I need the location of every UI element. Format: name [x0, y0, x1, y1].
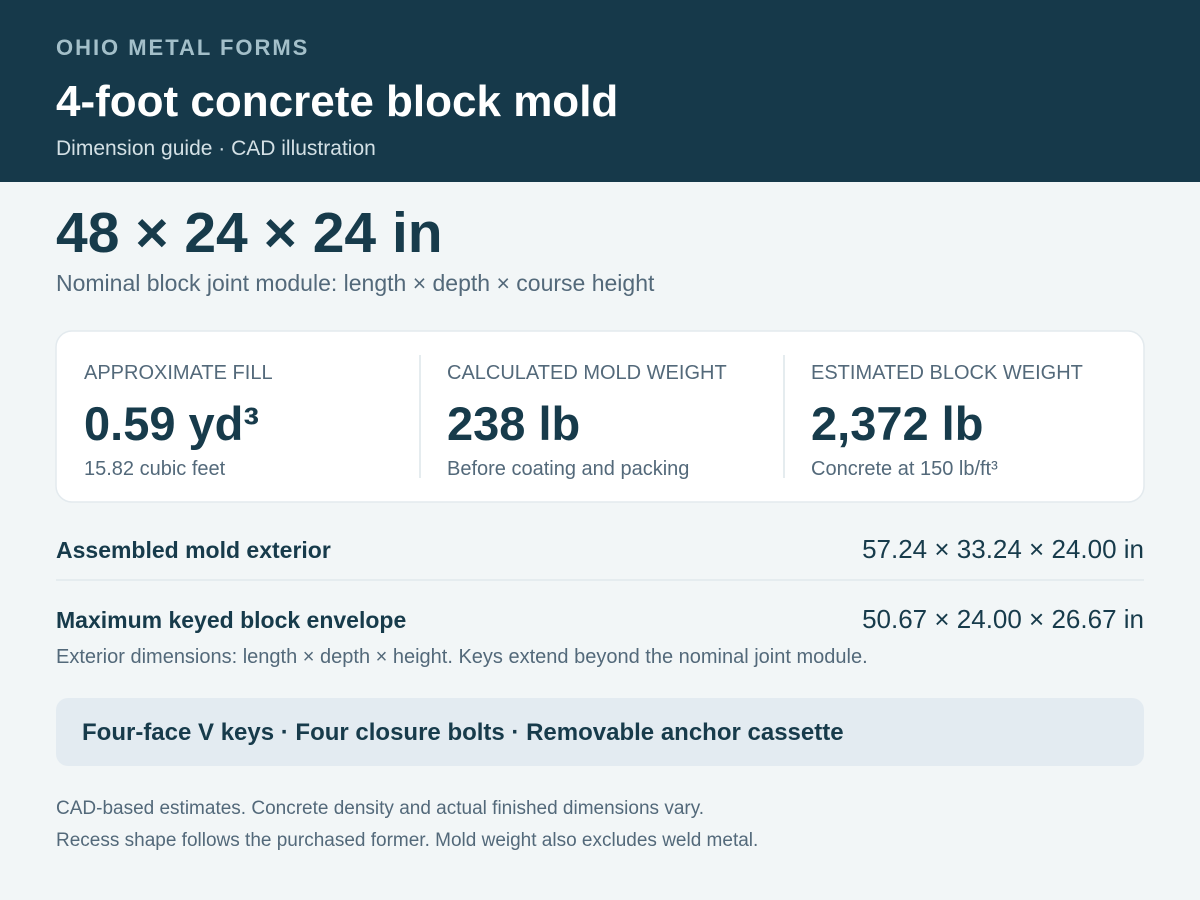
stat label: ESTIMATED BLOCK WEIGHT — [811, 362, 1083, 384]
title: 4-foot concrete block mold — [56, 77, 618, 126]
hero caption: Nominal block joint module: length × depth × course height — [56, 270, 654, 296]
stat: approximate fill — [84, 362, 273, 480]
stat label: APPROXIMATE FILL — [84, 362, 273, 384]
stat value: 238 lb — [447, 397, 580, 450]
footnotes: Recess shape follows the purchased former. Mold weight also excludes weld metal. — [56, 830, 758, 851]
stat label: CALCULATED MOLD WEIGHT — [447, 362, 727, 384]
dimensions note: Exterior dimensions: length × depth × height. Keys extend beyond the nominal joint module. — [56, 646, 868, 668]
stat note: Before coating and packing — [447, 458, 689, 480]
stat note: 15.82 cubic feet — [84, 458, 225, 480]
row value: maximum keyed block envelope: 50.67 × 24.00 × 26.67 in — [862, 604, 1144, 634]
stat value: 2,372 lb — [811, 397, 983, 450]
subtitle: Dimension guide · CAD illustration — [56, 137, 376, 160]
row label: maximum keyed block envelope: Maximum keyed block envelope — [56, 607, 406, 633]
hero dimension: 48 × 24 × 24 in — [56, 201, 443, 265]
eyebrow: brand: OHIO METAL FORMS — [56, 35, 309, 60]
footnotes — [56, 798, 758, 851]
feature text: Four-face V keys · Four closure bolts · Removable anchor cassette — [82, 719, 844, 746]
row label: assembled mold exterior: Assembled mold exterior — [56, 537, 331, 563]
stat value: 0.59 yd³ — [84, 397, 259, 450]
footnotes: CAD-based estimates. Concrete density and actual finished dimensions vary. — [56, 798, 704, 819]
stat: calculated mold weight — [447, 362, 727, 480]
row value: assembled mold exterior: 57.24 × 33.24 × 24.00 in — [862, 534, 1144, 564]
header band — [0, 0, 1200, 182]
stat note: Concrete at 150 lb/ft³ — [811, 458, 998, 480]
panel: stats card — [56, 330, 1144, 502]
stat: estimated block weight — [811, 362, 1083, 480]
feature banner — [56, 698, 1144, 766]
